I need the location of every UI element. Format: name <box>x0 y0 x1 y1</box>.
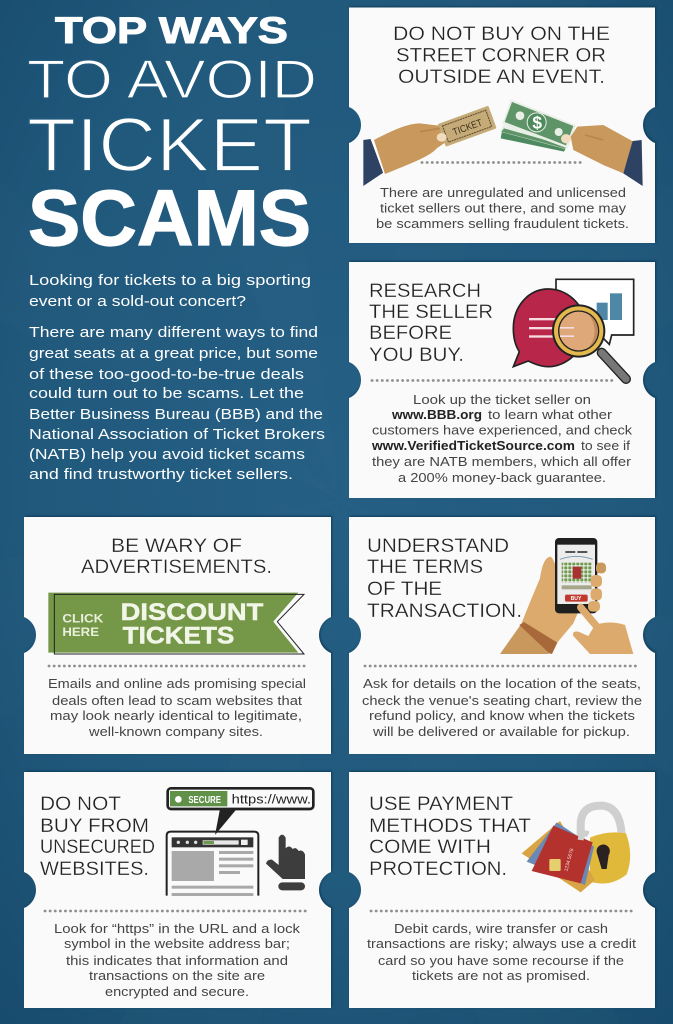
panel: be wary of advertisements <box>24 517 331 754</box>
heading: METHODS THAT <box>369 816 531 837</box>
heading <box>369 794 531 880</box>
body text: Ask for details on the location of the seats, <box>363 676 641 691</box>
heading: UNDERSTAND <box>367 536 509 557</box>
heading: USE PAYMENT <box>369 794 513 815</box>
intro text: National Association of Ticket Brokers <box>29 426 325 443</box>
intro text: of these too-good-to-be-true deals <box>29 366 304 383</box>
heading: WEBSITES. <box>40 859 149 880</box>
body text: may look nearly identical to legitimate, <box>50 708 302 723</box>
title: SCAMS <box>28 173 311 262</box>
ticket shape <box>24 517 331 754</box>
panel: do not buy on the street corner <box>349 8 655 243</box>
body text: deals often lead to scam websites that <box>52 693 302 708</box>
body text: this indicates that information and <box>66 953 288 968</box>
ticket shape <box>349 262 655 498</box>
panel: research the seller <box>349 262 655 498</box>
heading: UNSECURED <box>40 837 155 858</box>
heading: TRANSACTION. <box>367 601 522 622</box>
intro text: Looking for tickets to a big sporting <box>29 272 311 289</box>
body text: customers have experienced, and check <box>372 422 633 438</box>
body text: Look up the ticket seller on <box>413 392 591 407</box>
ticket shape <box>349 517 655 754</box>
heading: STREET CORNER OR <box>396 46 606 66</box>
icon: secure browser and pointer: https://www. <box>232 792 311 807</box>
heading <box>369 281 493 366</box>
body text: encrypted and secure. <box>105 984 249 999</box>
heading: OUTSIDE AN EVENT. <box>398 67 605 88</box>
heading: BE WARY OF <box>111 536 242 557</box>
body text: they are NATB members, which all offer <box>372 454 632 469</box>
icon: hand holding phone with seating chart: BUY <box>571 596 582 602</box>
intro text: and find trustworthy ticket sellers. <box>29 466 293 483</box>
heading: COME WITH <box>369 837 491 858</box>
icon: secure browser and pointer <box>167 788 313 896</box>
body text: Look for “https” in the URL and a lock <box>54 921 301 936</box>
body text <box>371 392 633 485</box>
body text: Debit cards, wire transfer or cash <box>394 921 608 936</box>
title: TICKET <box>27 103 312 188</box>
heading: RESEARCH <box>369 281 481 302</box>
body text: www.BBB.org <box>391 407 482 422</box>
body text: Emails and online ads promising special <box>48 676 306 691</box>
intro text: There are many different ways to find <box>29 324 318 341</box>
ticket shape <box>349 772 655 1008</box>
body text: check the venue's seating chart, review the <box>362 693 642 708</box>
intro text: (NATB) help you avoid ticket scams <box>29 446 305 463</box>
heading: PROTECTION. <box>369 859 507 880</box>
body text: to see if <box>581 438 630 453</box>
heading <box>367 536 522 622</box>
intro text <box>29 272 325 483</box>
intro text: could turn out to be scams. Let the <box>29 385 304 402</box>
body text <box>367 921 636 983</box>
banner: discount tickets: CLICK <box>62 611 104 625</box>
body text <box>54 921 301 999</box>
body text: refund policy, and know when the tickets <box>369 708 636 723</box>
heading <box>40 794 155 880</box>
body text: card so you have some recourse if the <box>378 953 624 968</box>
title: TOP WAYS <box>55 10 288 51</box>
heading <box>393 24 610 88</box>
body text: be scammers selling fraudulent tickets. <box>376 216 629 231</box>
heading: THE SELLER <box>369 302 493 323</box>
icon: hands exchanging ticket for cash <box>363 99 643 186</box>
body text <box>362 676 642 739</box>
heading: BEFORE <box>369 323 452 344</box>
banner: discount tickets <box>48 593 304 654</box>
heading: BUY FROM <box>40 816 149 837</box>
ticket shape <box>349 8 655 243</box>
icon: hand holding phone with seating chart <box>500 538 633 654</box>
icon: hands exchanging ticket for cash: $ <box>532 113 542 133</box>
body text: will be delivered or available for pickup. <box>372 724 630 739</box>
body text: transactions are risky; always use a credit <box>367 936 636 951</box>
banner: discount tickets: HERE <box>62 625 99 639</box>
body text: a 200% money-back guarantee. <box>398 470 606 485</box>
intro text: event or a sold-out concert? <box>29 293 246 310</box>
body text: symbol in the website address bar; <box>64 936 290 951</box>
intro text: great seats at a great price, but some <box>29 345 318 362</box>
heading: DO NOT BUY ON THE <box>393 24 610 45</box>
body text: www.VerifiedTicketSource.com <box>371 438 575 453</box>
icon: credit cards and padlock: 1234 5678 <box>563 848 575 872</box>
body text <box>48 676 306 739</box>
heading: YOU BUY. <box>369 345 464 366</box>
heading: DO NOT <box>40 794 121 815</box>
body text: There are unregulated and unlicensed <box>380 185 626 200</box>
icon: secure browser and pointer: SECURE <box>188 795 221 806</box>
body text: transactions on the site are <box>89 968 265 983</box>
banner: discount tickets: DISCOUNT <box>121 599 264 626</box>
icon: hands exchanging ticket for cash: TICKET <box>451 118 484 138</box>
heading: ADVERTISEMENTS. <box>81 557 272 578</box>
heading: OF THE <box>367 579 442 600</box>
body text: well-known company sites. <box>88 724 263 739</box>
intro text: Better Business Bureau (BBB) and the <box>29 406 323 423</box>
panel: use payment methods with protection <box>349 772 655 1008</box>
icon: speech bubbles and magnifier <box>513 279 634 379</box>
body text <box>376 185 629 231</box>
body text: to learn what other <box>488 407 613 422</box>
heading: THE TERMS <box>367 557 483 578</box>
heading <box>81 536 272 578</box>
panel: understand the terms <box>349 517 655 754</box>
panel: do not buy from unsecured websites <box>24 772 331 1008</box>
banner: discount tickets: TICKETS <box>123 622 234 649</box>
title: TO AVOID <box>27 48 317 110</box>
body text: tickets are not as promised. <box>412 968 590 983</box>
ticket shape <box>24 772 331 1008</box>
title <box>27 10 317 262</box>
body text: ticket sellers out there, and some may <box>380 200 627 216</box>
icon: credit cards and padlock <box>522 806 630 892</box>
